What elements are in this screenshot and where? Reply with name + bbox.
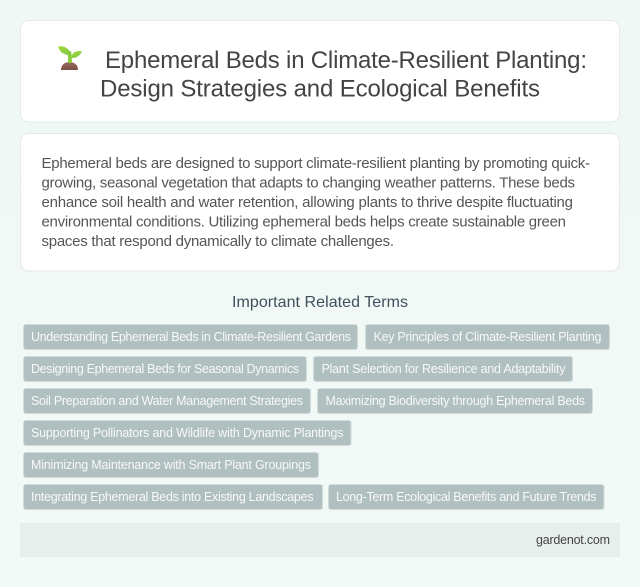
heading: important related terms: Important Related Terms bbox=[232, 294, 408, 311]
tag bbox=[328, 484, 604, 510]
intro paragraph: enhance soil health and water retention, allowing plants to thrive despite fluctuating bbox=[42, 194, 573, 211]
footer credit: gardenot.com bbox=[536, 533, 610, 547]
tag bbox=[366, 324, 610, 350]
title: Design Strategies and Ecological Benefits bbox=[100, 76, 540, 102]
tag: Minimizing Maintenance with Smart Plant Groupings bbox=[31, 458, 311, 472]
tag: Integrating Ephemeral Beds into Existing Landscapes bbox=[31, 490, 314, 504]
tag: Designing Ephemeral Beds for Seasonal Dynamics bbox=[31, 362, 299, 376]
tag list bbox=[24, 324, 610, 510]
panel: intro text card bbox=[20, 134, 620, 271]
tag bbox=[24, 388, 310, 414]
tag bbox=[24, 484, 322, 510]
title: Ephemeral Beds in Climate-Resilient Planting: bbox=[105, 47, 587, 74]
tag: Supporting Pollinators and Wildlife with Dynamic Plantings bbox=[31, 426, 344, 440]
tag bbox=[314, 356, 572, 382]
tag: Plant Selection for Resilience and Adaptability bbox=[322, 362, 566, 376]
tag bbox=[24, 324, 358, 350]
tag bbox=[24, 452, 318, 478]
icon: seedling bbox=[58, 46, 82, 70]
tag bbox=[24, 356, 306, 382]
tag bbox=[24, 420, 351, 446]
tag: Understanding Ephemeral Beds in Climate-Resilient Gardens bbox=[31, 330, 351, 344]
tag: Long-Term Ecological Benefits and Future Trends bbox=[336, 490, 596, 504]
tag: Maximizing Biodiversity through Ephemeral Beds bbox=[326, 394, 585, 408]
intro paragraph bbox=[42, 155, 590, 250]
tag bbox=[318, 388, 592, 414]
intro paragraph: growing, seasonal vegetation that adapts to changing weather patterns. These beds bbox=[42, 174, 575, 192]
intro paragraph: Ephemeral beds are designed to support climate-resilient planting by promoting quick- bbox=[42, 155, 590, 172]
title bbox=[100, 47, 587, 102]
panel: title card bbox=[20, 20, 620, 122]
footer bbox=[20, 523, 620, 557]
intro paragraph: environmental conditions. Utilizing ephemeral beds helps create sustainable green bbox=[42, 214, 566, 230]
intro paragraph: spaces that respond dynamically to climate challenges. bbox=[42, 233, 394, 250]
tag: Key Principles of Climate-Resilient Planting bbox=[374, 330, 602, 344]
tag: Soil Preparation and Water Management Strategies bbox=[31, 394, 303, 408]
